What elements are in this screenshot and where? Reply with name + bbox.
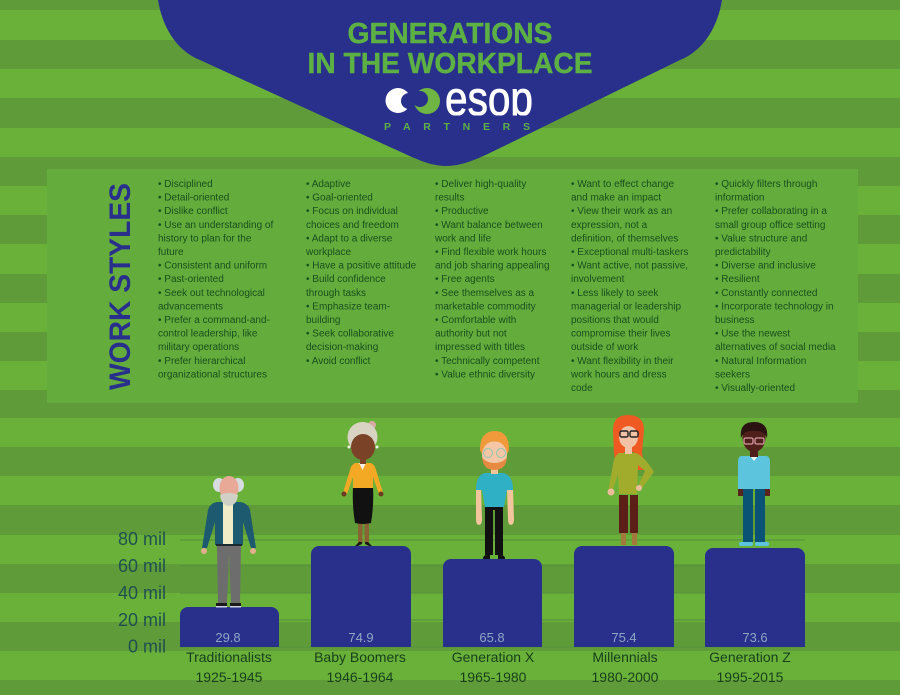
list: baby boomers: • Focus on individual: [306, 206, 398, 217]
bar: traditionalists: Traditionalists: [186, 649, 272, 665]
list: traditionalists: history to plan for the: [158, 233, 252, 244]
list: generation x: authority but not: [435, 329, 507, 340]
list: millennials: definition, of themselves: [571, 233, 678, 244]
list: baby boomers: decision-making: [306, 342, 378, 353]
list: generation x: • See themselves as a: [435, 288, 535, 299]
list: baby boomers: • Emphasize team-: [306, 301, 390, 312]
list: millennials: • Less likely to seek: [571, 288, 659, 299]
list: generation z: • Incorporate technology in: [715, 301, 834, 312]
list: millennials: code: [571, 383, 593, 394]
figure: millennial woman: [608, 415, 654, 545]
list: millennials: • Want active, not passive,: [571, 261, 688, 272]
title: GENERATIONS: [348, 18, 552, 50]
list: generation x: marketable commodity: [435, 301, 536, 312]
y axis labels: [118, 529, 166, 656]
figure: generation z man: [738, 422, 770, 546]
list: generation z: alternatives of social media: [715, 342, 836, 353]
list: millennials: work hours and dress: [570, 369, 667, 380]
list: traditionalists: military operations: [158, 342, 239, 353]
figure: baby boomer woman: [342, 421, 384, 546]
bar: generation x: [443, 559, 542, 685]
bar: generation z: [705, 548, 805, 685]
bar: generation x: 1965-1980: [460, 669, 527, 685]
list: traditionalists: • Past-oriented: [158, 274, 224, 285]
list: baby boomers: • Adapt to a diverse: [306, 233, 393, 244]
list: traditionalists: future: [158, 247, 184, 258]
list: generation z: predictability: [715, 247, 771, 258]
figure: traditionalist man: [201, 476, 256, 608]
list: generation x: • Value ethnic diversity: [435, 369, 535, 380]
list: traditionalists: control leadership, like: [158, 329, 258, 340]
bar: millennials: 75.4: [611, 630, 637, 645]
list: millennials: positions that would: [571, 315, 659, 326]
bar: baby boomers: [311, 546, 411, 685]
list: generation z: information: [715, 193, 764, 204]
figure: generation x man: [476, 431, 514, 559]
header banner: [158, 0, 722, 166]
list: generation x: • Find flexible work hours: [435, 247, 546, 258]
list: generation z: • Use the newest: [715, 329, 790, 340]
list: generation z: • Value structure and: [715, 233, 807, 244]
list: generation x: • Deliver high-quality: [435, 179, 526, 190]
list: millennials: • View their work as an: [571, 206, 672, 217]
logo: esop partners: esop: [445, 73, 533, 126]
list: generation x: • Productive: [435, 206, 489, 217]
y axis labels: 0 mil: [128, 636, 166, 656]
list: generation x: results: [435, 193, 464, 204]
list: traditionalists: • Disciplined: [158, 179, 213, 190]
list: traditionalists: organizational structures: [158, 369, 267, 380]
bar: baby boomers: 1946-1964: [327, 669, 394, 685]
list: traditionalists: • Detail-oriented: [158, 193, 229, 204]
y axis labels: 40 mil: [118, 583, 166, 603]
list: baby boomers: • Have a positive attitude: [306, 261, 417, 272]
list: millennials: outside of work: [571, 342, 639, 353]
list: generation x: and job sharing appealing: [435, 261, 550, 272]
list: generation z: • Prefer collaborating in a: [715, 206, 827, 217]
y axis labels: 80 mil: [118, 529, 166, 549]
list: generation z: business: [715, 315, 754, 326]
list: generation z: • Natural Information: [715, 356, 806, 367]
list: generation x: • Want balance between: [435, 220, 543, 231]
list: generation z: • Constantly connected: [715, 288, 817, 299]
list: generation x: work and life: [434, 233, 492, 244]
bar: baby boomers: Baby Boomers: [314, 649, 406, 665]
list: baby boomers: building: [306, 315, 340, 326]
list: millennials: managerial or leadership: [571, 301, 682, 312]
list: generation z: • Diverse and inclusive: [715, 261, 816, 272]
list: baby boomers: • Build confidence: [306, 274, 386, 285]
list: generation z: • Quickly filters through: [715, 179, 817, 190]
list: baby boomers: • Goal-oriented: [306, 193, 373, 204]
bar: millennials: 1980-2000: [592, 669, 659, 685]
list: generation x: • Free agents: [435, 274, 495, 285]
list: traditionalists: • Consistent and uniform: [158, 261, 267, 272]
list: baby boomers: • Avoid conflict: [306, 356, 371, 367]
list: generation z: seekers: [715, 369, 750, 380]
y axis labels: 60 mil: [118, 556, 166, 576]
panel: work styles: [47, 169, 858, 403]
bar chart: [118, 529, 805, 685]
list: generation x: impressed with titles: [435, 342, 525, 353]
list: millennials: • Exceptional multi-taskers: [571, 247, 688, 258]
bar: traditionalists: [180, 607, 279, 685]
list: millennials: • Want flexibility in their: [571, 356, 674, 367]
bar: generation x: 65.8: [479, 630, 505, 645]
list: millennials: • Want to effect change: [571, 179, 674, 190]
list: baby boomers: workplace: [305, 247, 351, 258]
bar: millennials: [574, 546, 674, 685]
list: traditionalists: • Dislike conflict: [158, 206, 228, 217]
heading: work styles: WORK STYLES: [104, 183, 137, 390]
bar: generation z: 73.6: [742, 630, 768, 645]
bar: millennials: Millennials: [592, 649, 658, 665]
list: millennials: compromise their lives: [571, 329, 670, 340]
bar: traditionalists: 1925-1945: [196, 669, 263, 685]
list: traditionalists: • Use an understanding of: [158, 220, 273, 231]
header banner: IN THE WORKPLACE: [308, 48, 592, 80]
list: millennials: expression, not a: [571, 220, 648, 231]
list: generation x: • Comfortable with: [435, 315, 516, 326]
list: baby boomers: • Seek collaborative: [306, 329, 394, 340]
logo: esop partners: PARTNERS: [384, 121, 530, 133]
bar: baby boomers: 74.9: [348, 630, 374, 645]
list: generation z: small group office setting: [715, 220, 825, 231]
list: generation x: • Technically competent: [435, 356, 540, 367]
list: traditionalists: • Prefer a command-and-: [158, 315, 270, 326]
list: generation z: • Resilient: [715, 274, 760, 285]
list: traditionalists: • Prefer hierarchical: [158, 356, 245, 367]
bar: traditionalists: 29.8: [215, 630, 241, 645]
y axis labels: 20 mil: [118, 610, 166, 630]
list: baby boomers: choices and freedom: [306, 220, 399, 231]
bar: generation x: Generation X: [452, 649, 535, 665]
list: millennials: and make an impact: [571, 193, 661, 204]
list: baby boomers: through tasks: [306, 288, 366, 299]
bar: generation z: 1995-2015: [717, 669, 784, 685]
list: traditionalists: advancements: [158, 301, 223, 312]
list: baby boomers: • Adaptive: [306, 179, 351, 190]
logo: esop partners: [384, 88, 532, 130]
list: millennials: involvement: [571, 274, 625, 285]
list: traditionalists: • Seek out technological: [158, 288, 265, 299]
bar: generation z: Generation Z: [709, 649, 791, 665]
list: generation z: • Visually-oriented: [715, 383, 795, 394]
